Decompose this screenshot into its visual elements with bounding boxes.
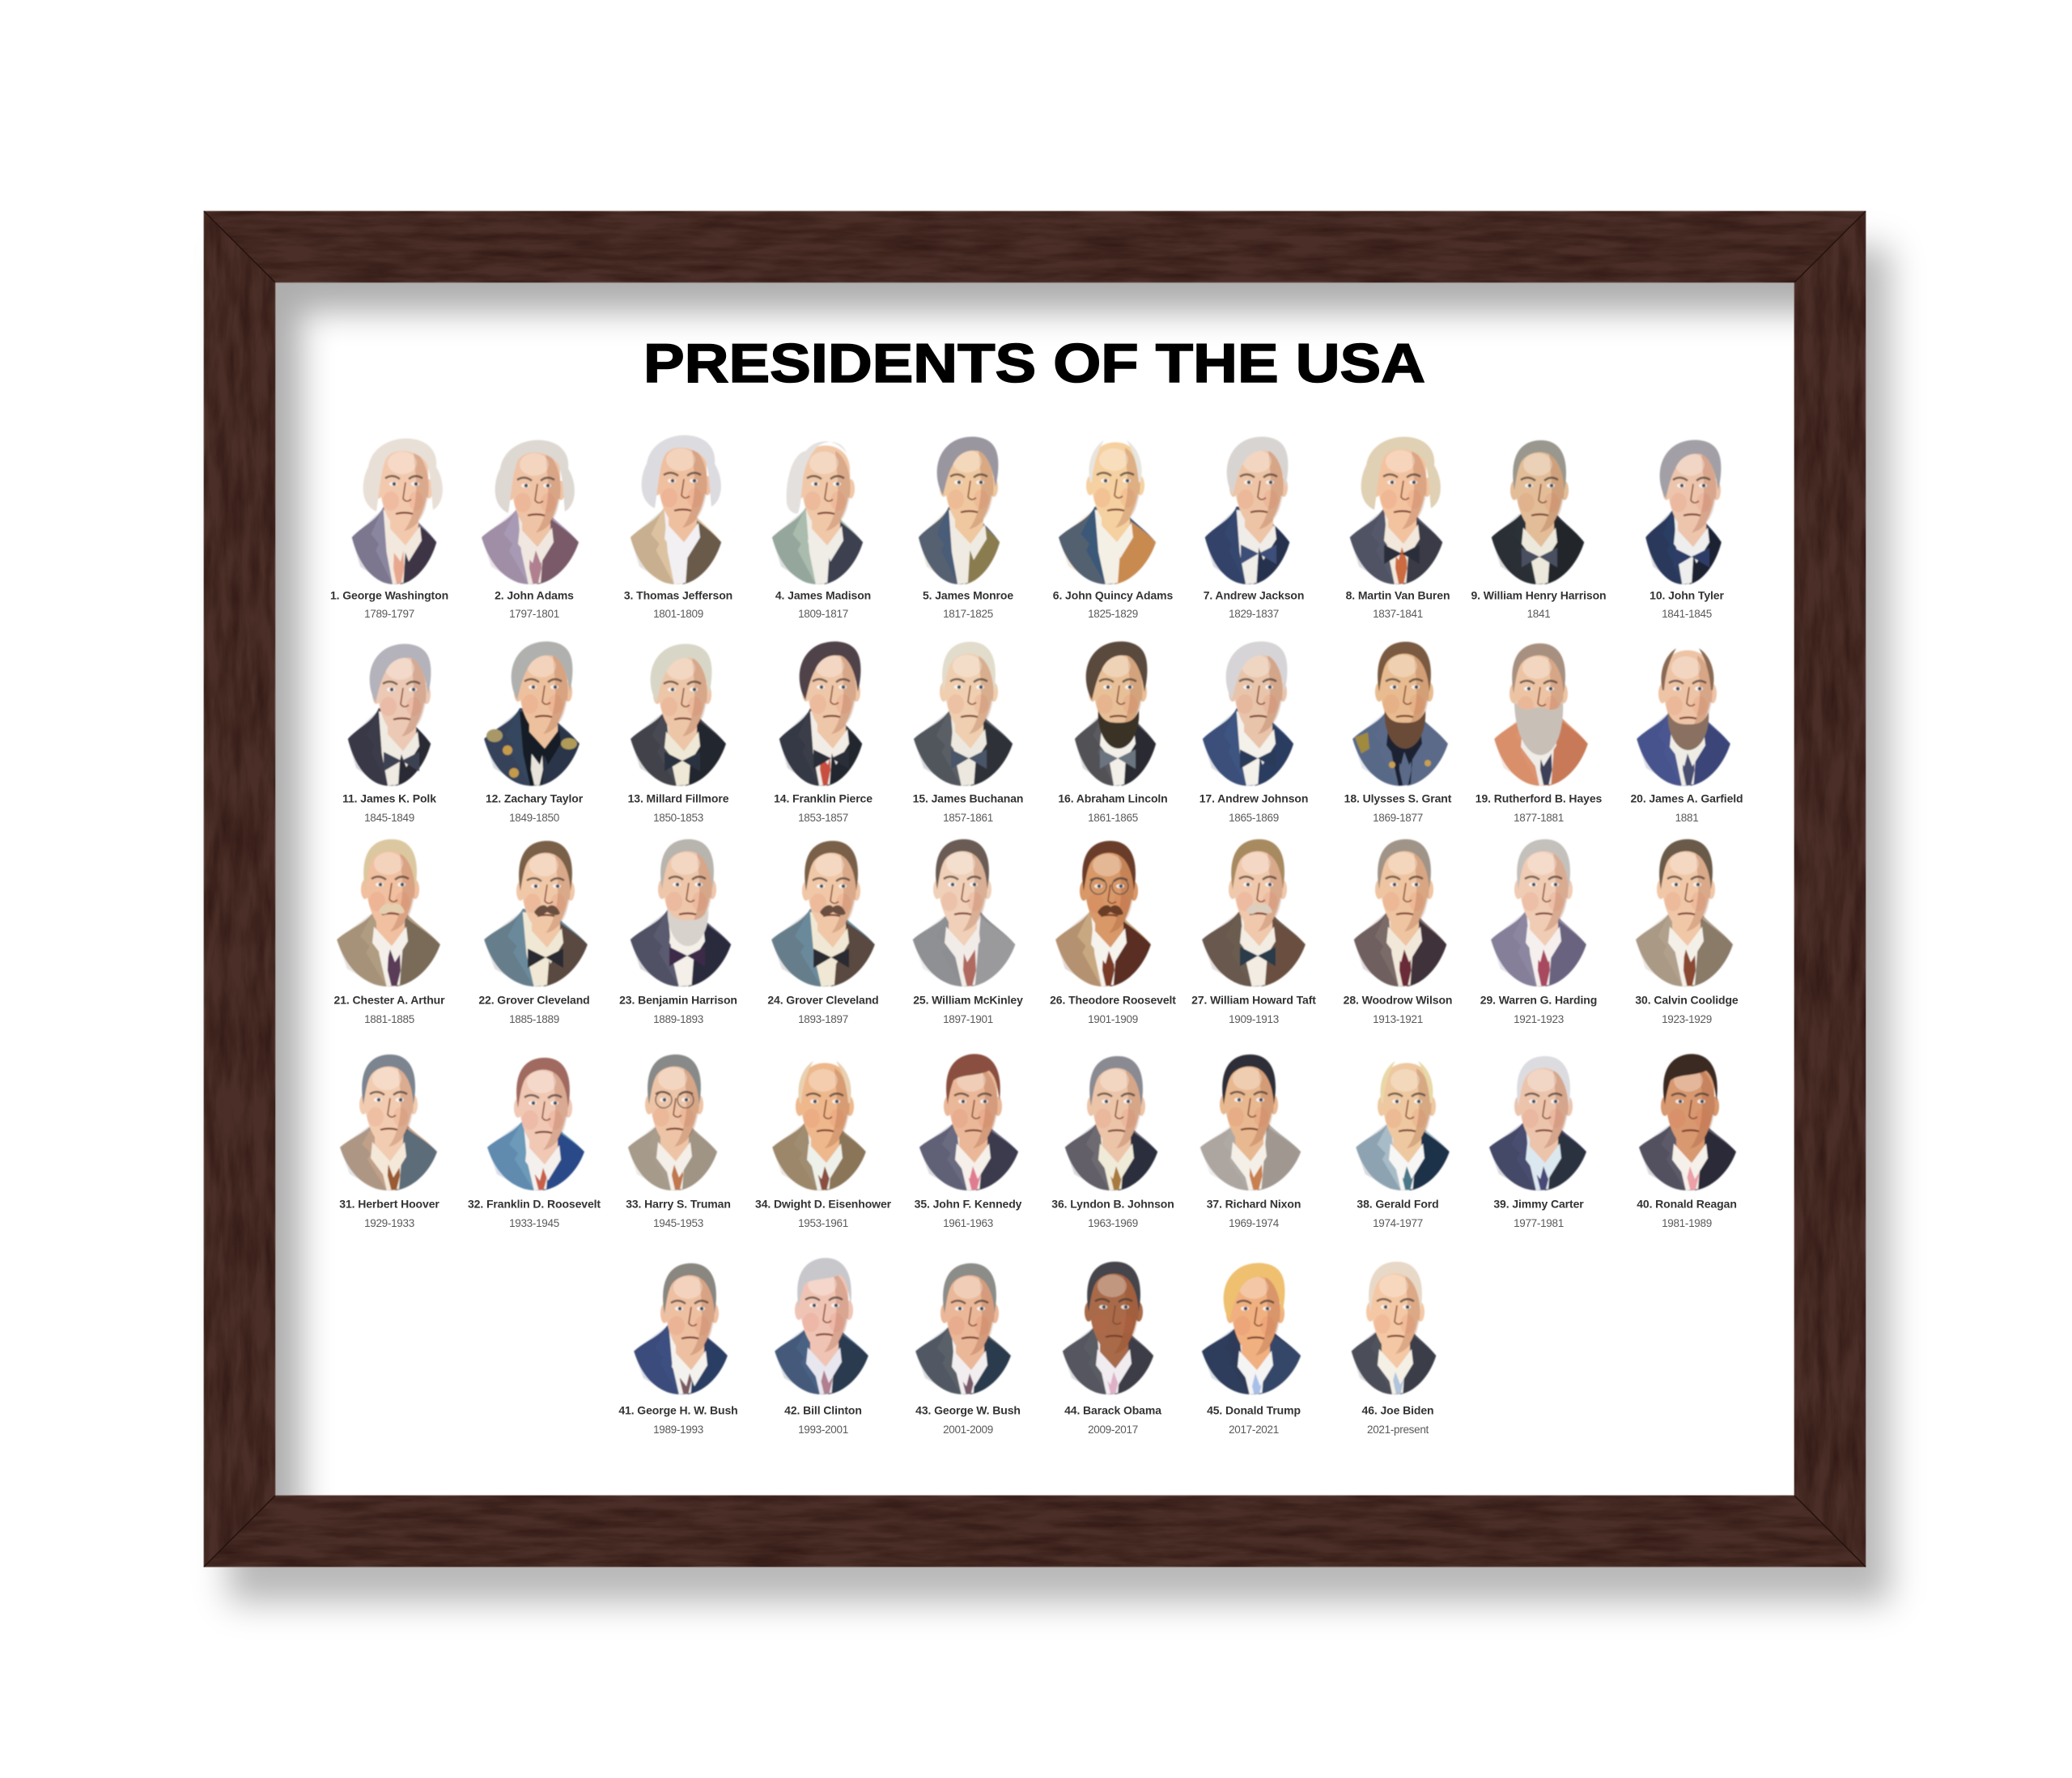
- president: Woodrow Wilson: [1344, 839, 1452, 1025]
- years: 1929-1933: [364, 1217, 414, 1229]
- president: Joe Biden: [1352, 1262, 1436, 1436]
- name: 46. Joe Biden: [1362, 1403, 1433, 1416]
- president: Franklin D. Roosevelt: [468, 1058, 601, 1229]
- name: 25. William McKinley: [913, 994, 1023, 1007]
- years: 1861-1865: [1088, 812, 1138, 824]
- portrait: George Washington: [352, 439, 443, 584]
- name: 21. Chester A. Arthur: [334, 994, 445, 1007]
- name: 39. Jimmy Carter: [1493, 1198, 1584, 1211]
- name: 29. Warren G. Harding: [1480, 994, 1597, 1007]
- name: 14. Franklin Pierce: [774, 791, 873, 804]
- portrait: Millard Fillmore: [631, 644, 726, 786]
- years: 1845-1849: [364, 812, 414, 824]
- years: 1841-1845: [1662, 608, 1712, 620]
- president: Lyndon B. Johnson: [1051, 1056, 1174, 1229]
- years: 1993-2001: [798, 1424, 848, 1436]
- portrait: Barack Obama: [1063, 1262, 1153, 1394]
- president: Donald Trump: [1202, 1263, 1301, 1436]
- name: 34. Dwight D. Eisenhower: [755, 1198, 892, 1211]
- years: 1829-1837: [1229, 608, 1279, 620]
- years: 1921-1923: [1514, 1013, 1564, 1025]
- name: 3. Thomas Jefferson: [624, 589, 732, 602]
- years: 1869-1877: [1373, 812, 1423, 824]
- name: 36. Lyndon B. Johnson: [1051, 1198, 1174, 1211]
- president: Barack Obama: [1063, 1262, 1161, 1436]
- portrait: Jimmy Carter: [1489, 1056, 1586, 1190]
- name: 37. Richard Nixon: [1207, 1198, 1301, 1211]
- name: 41. George H. W. Bush: [618, 1403, 738, 1416]
- president: Rutherford B. Hayes: [1475, 643, 1603, 824]
- name: 17. Andrew Johnson: [1199, 791, 1308, 804]
- years: 2017-2021: [1229, 1424, 1279, 1436]
- portrait: Thomas Jefferson: [631, 435, 721, 584]
- president: James Buchanan: [913, 642, 1023, 824]
- years: 1857-1861: [943, 812, 993, 824]
- portrait: Donald Trump: [1202, 1263, 1301, 1394]
- portrait: James A. Garfield: [1637, 648, 1730, 786]
- name: 28. Woodrow Wilson: [1344, 994, 1452, 1007]
- years: 1963-1969: [1088, 1217, 1138, 1229]
- name: 45. Donald Trump: [1207, 1403, 1301, 1416]
- portrait: Dwight D. Eisenhower: [772, 1061, 866, 1190]
- years: 1889-1893: [653, 1013, 703, 1025]
- name: 30. Calvin Coolidge: [1635, 994, 1739, 1007]
- president: Herbert Hoover: [339, 1054, 439, 1229]
- president: John F. Kennedy: [915, 1054, 1022, 1229]
- name: 1. George Washington: [330, 589, 448, 602]
- president: John Quincy Adams: [1053, 440, 1174, 620]
- years: 1881-1885: [364, 1013, 414, 1025]
- name: 8. Martin Van Buren: [1346, 589, 1450, 602]
- portrait: George H. W. Bush: [634, 1263, 728, 1394]
- portrait: Lyndon B. Johnson: [1065, 1056, 1157, 1190]
- president: Theodore Roosevelt: [1050, 841, 1176, 1025]
- name: 6. John Quincy Adams: [1053, 589, 1174, 602]
- president: Millard Fillmore: [628, 644, 729, 824]
- name: 15. James Buchanan: [913, 791, 1023, 804]
- years: 1853-1857: [798, 812, 848, 824]
- president: George W. Bush: [915, 1263, 1021, 1436]
- president: Grover Cleveland (second term): [767, 841, 879, 1025]
- president: Grover Cleveland: [478, 841, 590, 1025]
- years: 1953-1961: [798, 1217, 848, 1229]
- president: John Adams: [482, 440, 579, 620]
- president: Warren G. Harding: [1480, 839, 1597, 1025]
- president: Jimmy Carter: [1489, 1056, 1586, 1229]
- president: William McKinley: [913, 839, 1023, 1025]
- president: Dwight D. Eisenhower: [755, 1061, 892, 1229]
- president: Richard Nixon: [1200, 1054, 1301, 1229]
- portrait: Martin Van Buren: [1350, 437, 1442, 584]
- name: 12. Zachary Taylor: [486, 791, 584, 804]
- years: 1961-1963: [943, 1217, 993, 1229]
- portrait: Franklin Pierce: [779, 642, 862, 786]
- name: 23. Benjamin Harrison: [619, 994, 737, 1007]
- name: 5. James Monroe: [923, 589, 1013, 602]
- portrait: Franklin D. Roosevelt: [487, 1058, 584, 1190]
- portrait: Zachary Taylor: [484, 642, 580, 786]
- president: Chester A. Arthur: [334, 839, 445, 1025]
- years: 1913-1921: [1373, 1013, 1423, 1025]
- years: 1923-1929: [1662, 1013, 1712, 1025]
- president: Ulysses S. Grant: [1344, 642, 1452, 824]
- name: 43. George W. Bush: [915, 1403, 1021, 1416]
- years: 1897-1901: [943, 1013, 993, 1025]
- portrait: Rutherford B. Hayes: [1494, 643, 1588, 786]
- years: 1974-1977: [1373, 1217, 1423, 1229]
- years: 1817-1825: [943, 608, 993, 620]
- name: 19. Rutherford B. Hayes: [1475, 791, 1603, 804]
- portrait: William McKinley: [913, 839, 1015, 987]
- years: 1825-1829: [1088, 608, 1138, 620]
- portrait: Andrew Jackson: [1205, 437, 1289, 584]
- years: 1901-1909: [1088, 1013, 1138, 1025]
- portrait: John Tyler: [1645, 440, 1722, 584]
- years: 1945-1953: [653, 1217, 703, 1229]
- portrait: Richard Nixon: [1200, 1054, 1301, 1190]
- name: 4. James Madison: [775, 589, 871, 602]
- president: William Henry Harrison: [1471, 440, 1606, 620]
- name: 13. Millard Fillmore: [628, 791, 729, 804]
- name: 11. James K. Polk: [342, 791, 436, 804]
- portrait: James Buchanan: [914, 642, 1013, 786]
- white mat with inner shadow: [275, 282, 1794, 1496]
- wooden frame: [204, 211, 1866, 1567]
- years: 1877-1881: [1514, 812, 1564, 824]
- years: 1977-1981: [1514, 1217, 1564, 1229]
- name: 10. John Tyler: [1650, 589, 1724, 602]
- years: 1809-1817: [798, 608, 848, 620]
- name: 44. Barack Obama: [1064, 1403, 1161, 1416]
- years: 1865-1869: [1229, 812, 1279, 824]
- years: 1849-1850: [509, 812, 559, 824]
- president: Andrew Jackson: [1204, 437, 1304, 620]
- years: 1801-1809: [653, 608, 703, 620]
- portrait: Bill Clinton: [775, 1258, 868, 1394]
- president: Thomas Jefferson: [624, 435, 732, 620]
- president: Martin Van Buren: [1346, 437, 1450, 620]
- title: PRESIDENTS OF THE USA: [643, 333, 1425, 394]
- president: Andrew Johnson: [1199, 642, 1308, 824]
- portrait: Abraham Lincoln: [1075, 642, 1156, 786]
- portrait: James Monroe: [919, 437, 1000, 584]
- president: Ronald Reagan: [1637, 1054, 1737, 1229]
- portrait: Ulysses S. Grant: [1352, 642, 1448, 786]
- president: Gerald Ford: [1356, 1061, 1450, 1229]
- years: 2009-2017: [1088, 1424, 1138, 1436]
- portrait: James K. Polk: [348, 644, 431, 786]
- portrait: Warren G. Harding: [1491, 839, 1586, 987]
- president: George Washington: [330, 439, 448, 620]
- portrait: William Henry Harrison: [1492, 440, 1584, 584]
- name: 20. James A. Garfield: [1630, 791, 1743, 804]
- portrait: Theodore Roosevelt: [1055, 841, 1151, 987]
- years: 1797-1801: [509, 608, 559, 620]
- years: 1850-1853: [653, 812, 703, 824]
- president: Abraham Lincoln: [1058, 642, 1168, 824]
- years: 1933-1945: [509, 1217, 559, 1229]
- years: 1885-1889: [509, 1013, 559, 1025]
- president: James Madison: [772, 441, 871, 620]
- portrait: James Madison: [772, 441, 863, 584]
- years: 1969-1974: [1229, 1217, 1280, 1229]
- portrait: Joe Biden: [1352, 1262, 1436, 1394]
- name: 27. William Howard Taft: [1191, 994, 1316, 1007]
- portrait: Calvin Coolidge: [1636, 839, 1733, 987]
- years: 1989-1993: [653, 1424, 703, 1436]
- president: William Howard Taft: [1191, 839, 1316, 1025]
- name: 35. John F. Kennedy: [915, 1198, 1022, 1211]
- portrait: Herbert Hoover: [340, 1054, 437, 1190]
- years: 1909-1913: [1229, 1013, 1279, 1025]
- name: 22. Grover Cleveland: [478, 994, 590, 1007]
- portrait: Benjamin Harrison: [631, 839, 731, 987]
- name: 18. Ulysses S. Grant: [1344, 791, 1452, 804]
- president: Calvin Coolidge: [1635, 839, 1739, 1025]
- president: James K. Polk: [342, 644, 436, 824]
- name: 26. Theodore Roosevelt: [1050, 994, 1176, 1007]
- president: Harry S. Truman: [626, 1054, 731, 1229]
- president: James A. Garfield: [1630, 648, 1743, 824]
- years: 2001-2009: [943, 1424, 993, 1436]
- president: George H. W. Bush: [618, 1263, 738, 1436]
- portrait: Chester A. Arthur: [337, 839, 440, 987]
- president: Benjamin Harrison: [619, 839, 737, 1025]
- president: Bill Clinton: [775, 1258, 868, 1436]
- portrait: Woodrow Wilson: [1354, 839, 1446, 987]
- portrait: Andrew Johnson: [1203, 642, 1293, 786]
- portrait: Grover Cleveland: [771, 841, 875, 987]
- years: 1881: [1675, 812, 1698, 824]
- president: Franklin Pierce: [774, 642, 873, 824]
- name: 2. John Adams: [495, 589, 574, 602]
- name: 24. Grover Cleveland: [767, 994, 879, 1007]
- years: 1893-1897: [798, 1013, 848, 1025]
- years: 1789-1797: [364, 608, 414, 620]
- name: 38. Gerald Ford: [1357, 1198, 1439, 1211]
- name: 42. Bill Clinton: [784, 1403, 862, 1416]
- name: 33. Harry S. Truman: [626, 1198, 731, 1211]
- president: John Tyler: [1645, 440, 1724, 620]
- portrait: John Adams: [482, 440, 579, 584]
- portrait: Grover Cleveland: [484, 841, 588, 987]
- portrait: John F. Kennedy: [919, 1054, 1018, 1190]
- portrait: William Howard Taft: [1202, 839, 1306, 987]
- president: James Monroe: [919, 437, 1013, 620]
- portrait: Ronald Reagan: [1639, 1054, 1736, 1190]
- portrait: John Quincy Adams: [1059, 440, 1156, 584]
- name: 31. Herbert Hoover: [339, 1198, 439, 1211]
- president: Zachary Taylor: [484, 642, 584, 824]
- years: 2021-present: [1367, 1424, 1429, 1436]
- name: 16. Abraham Lincoln: [1058, 791, 1168, 804]
- name: 7. Andrew Jackson: [1204, 589, 1304, 602]
- years: 1981-1989: [1662, 1217, 1712, 1229]
- years: 1841: [1527, 608, 1550, 620]
- name: 40. Ronald Reagan: [1637, 1198, 1737, 1211]
- years: 1837-1841: [1373, 608, 1423, 620]
- frame shadow: [204, 211, 1866, 1567]
- portrait: George W. Bush: [915, 1263, 1011, 1394]
- portrait: Harry S. Truman: [628, 1054, 717, 1190]
- name: 9. William Henry Harrison: [1471, 589, 1606, 602]
- name: 32. Franklin D. Roosevelt: [468, 1198, 601, 1211]
- portrait: Gerald Ford: [1356, 1061, 1450, 1190]
